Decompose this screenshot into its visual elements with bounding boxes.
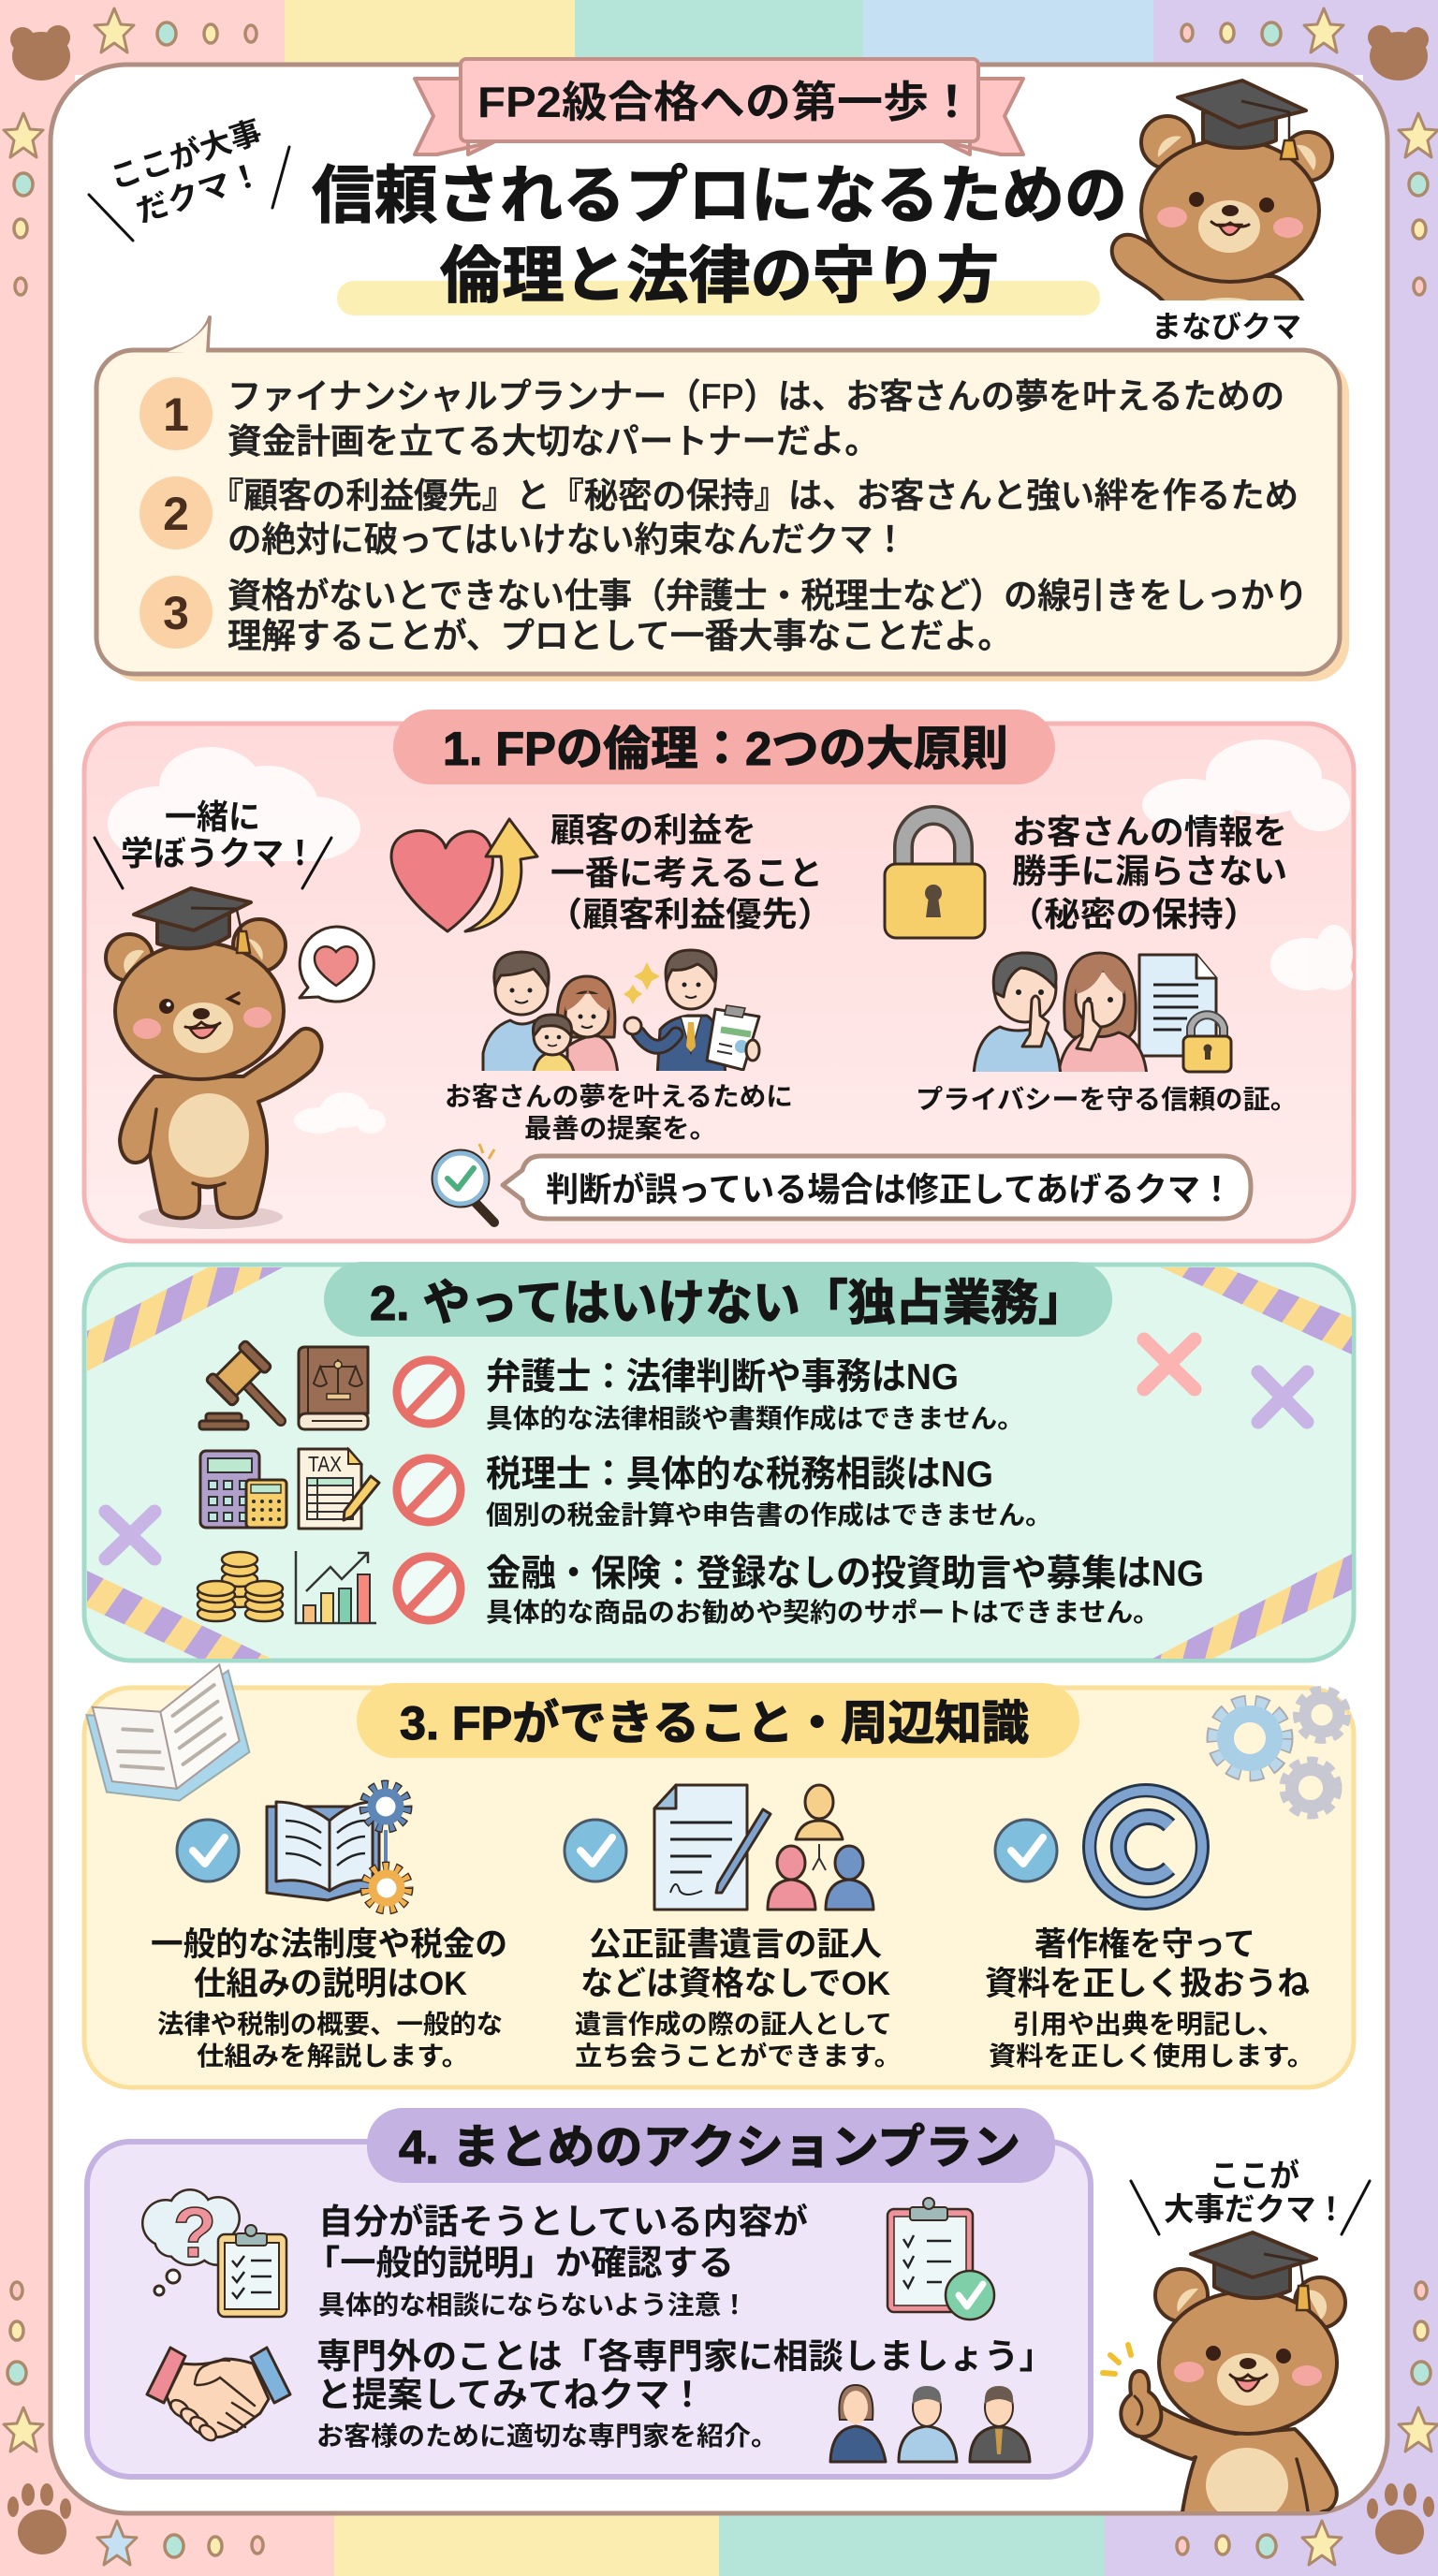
row: 税理士 [200, 1449, 1052, 1530]
text: 専門家に相談: お客様のために適切な専門家を紹介。 [316, 2422, 778, 2451]
callout: 修正 [503, 1156, 1251, 1219]
text: 専門家に相談: 専門外のことは「各専門家に相談しましょう」 [316, 2337, 1054, 2376]
mascot: waving bear with graduation cap [1112, 80, 1332, 320]
bear speech: 一緒に学ぼうクマ！ [95, 798, 331, 888]
column 2: 公正証書遺言の証人 [565, 1785, 902, 2071]
illustration: privacy, two people with document and lock [974, 953, 1231, 1076]
row: 金融・保険: 具体的な商品のお勧めや契約のサポートはできません。 [486, 1598, 1160, 1627]
row: 弁護士: 弁護士：法律判断や事務はNG [486, 1357, 959, 1398]
section heading: 2. やってはいけない「独占業務」 [370, 1277, 1086, 1331]
icon: heart speech bubble [300, 927, 374, 1002]
panel 1: FPの倫理 [84, 710, 1354, 1241]
row: 金融・保険: 金融・保険：登録なしの投資助言や募集はNG [486, 1554, 1204, 1594]
row: 弁護士 [199, 1340, 1024, 1433]
point 2: の絶対に破ってはいけない約束なんだクマ！ [227, 520, 907, 559]
column 1: 一般的な説明 [151, 1785, 507, 2071]
icon: prohibited [397, 1458, 461, 1522]
callout: 修正: 判断が誤っている場合は修正してあげるクマ！ [546, 1170, 1233, 1208]
row: 金融・保険 [198, 1551, 1204, 1627]
column 3: 著作権 [985, 1785, 1314, 2071]
clouds [108, 739, 1353, 1134]
text: 秘密の保持 [1008, 812, 1287, 933]
section heading: 1. FPの倫理：2つの大原則 [443, 723, 1008, 775]
bear speech: ここが大事だクマ！ [1131, 2158, 1370, 2234]
sparkle marks near thumb [1103, 2345, 1131, 2374]
point 1: ファイナンシャルプランナー（FP）は、お客さんの夢を叶えるための [227, 377, 1284, 416]
column 1: 一般的な説明: 仕組みを解説します。 [197, 2042, 469, 2071]
icon: clipboard with green check [888, 2198, 994, 2320]
icon: check [177, 1820, 239, 1881]
text: 顧客利益優先: 一番に考えること [550, 854, 823, 892]
caption: 最善の提案: お客さんの夢を叶えるために [445, 1082, 793, 1111]
bear speech: 一緒に学ぼうクマ！: 一緒に [165, 798, 260, 836]
point 2 [139, 476, 1299, 559]
bear speech: 一緒に学ぼうクマ！: 学ぼうクマ！ [121, 834, 316, 872]
point 1 [139, 377, 1284, 461]
point 1: 資金計画を立てる大切なパートナーだよ。 [227, 422, 879, 461]
point 3: 3 [163, 587, 189, 639]
text: 一般的説明: 自分が話そうとしている内容が [318, 2203, 808, 2241]
icon: signed document and pen [654, 1785, 770, 1910]
column 2: 公正証書遺言の証人: 立ち会うことができます。 [575, 2041, 902, 2071]
icon: growth chart [296, 1551, 376, 1623]
ribbon banner: FP2級合格への第一歩！: FP2級合格への第一歩！ [477, 78, 975, 126]
point 3: 資格がないとできない仕事（弁護士・税理士など）の線引きをしっかり [227, 577, 1308, 615]
decorative open book [82, 1662, 257, 1816]
text: 専門家に相談 [316, 2337, 1054, 2451]
section heading [357, 1683, 1079, 1758]
panel 3: FPができること [82, 1662, 1354, 2087]
caption: プライバシー: プライバシーを守る信頼の証。 [916, 1085, 1298, 1114]
column 2: 公正証書遺言の証人: 遺言作成の際の証人として [575, 2010, 892, 2039]
ribbon banner: FP2級合格への第一歩！ [415, 59, 1023, 154]
text: 顧客利益優先 [547, 811, 833, 933]
icon: prohibited [397, 1557, 461, 1620]
column 3: 著作権: 著作権を守って [1034, 1926, 1255, 1963]
caption: 最善の提案 [445, 1082, 793, 1143]
column 1: 一般的な説明: 一般的な法制度や税金の [151, 1926, 507, 1963]
caption: 最善の提案: 最善の提案を。 [524, 1114, 717, 1143]
point 1: 1 [163, 388, 189, 441]
panel 4: まとめのアクションプラン [87, 2108, 1091, 2477]
icon: book and gears [267, 1785, 408, 1910]
tilted callout: ここが大事だクマ！: だクマ！ [132, 156, 266, 229]
main title [312, 161, 1127, 310]
mascot: thumbs-up bear [1121, 2232, 1345, 2523]
point 3: 理解することが、プロとして一番大事なことだよ。 [227, 617, 1012, 655]
icon: thought cloud with question and clipboard: ? [173, 2193, 216, 2273]
icon: calculators [200, 1451, 286, 1528]
tilted callout: ここが大事だクマ！: ここが大事 [106, 114, 266, 196]
main title: 信頼されるプロになるための [312, 161, 1127, 231]
icon: padlock [885, 815, 985, 938]
column 3: 著作権: 資料を正しく扱おうね [985, 1966, 1310, 2002]
row: 税理士: 税理士：具体的な税務相談はNG [486, 1455, 993, 1495]
section heading: 3. FPができること・周辺知識 [400, 1697, 1029, 1749]
text: 顧客利益優先: 顧客の利益を [550, 811, 756, 849]
main title: 倫理と法律の守り方 [440, 241, 999, 310]
point 3 [139, 576, 1308, 655]
mascot: winking bear [106, 888, 322, 1229]
text: 顧客利益優先: （顧客利益優先） [547, 895, 833, 933]
icon: magnifier with check [433, 1144, 494, 1222]
illustration: family with advisor [483, 950, 759, 1076]
panel 2: 独占業務 [84, 1262, 1354, 1661]
column 2: 公正証書遺言の証人: などは資格なしでOK [580, 1966, 890, 2002]
icon: thought cloud with question and clipboard [141, 2188, 286, 2317]
point 2: 『顧客の利益優先』と『秘密の保持』は、お客さんと強い絆を作るため [210, 476, 1299, 515]
icon: law book [299, 1347, 368, 1429]
point 2: 2 [163, 488, 189, 540]
section heading [367, 2108, 1055, 2183]
text: 秘密の保持: お客さんの情報を [1012, 812, 1287, 851]
text: 一般的説明 [304, 2203, 808, 2320]
yellow title highlight [337, 281, 1100, 315]
tilted callout: ここが大事だクマ！ [89, 114, 289, 241]
section heading: 4. まとめのアクションプラン [399, 2121, 1020, 2174]
text: 一般的説明: 「一般的説明」か確認する [304, 2244, 734, 2282]
bear speech: ここが大事だクマ！: 大事だクマ！ [1164, 2192, 1346, 2228]
section heading [393, 710, 1055, 784]
column 2: 公正証書遺言の証人: 公正証書遺言の証人 [589, 1926, 882, 1963]
icon: prohibited [397, 1360, 461, 1424]
icon: heart with up arrow [391, 819, 537, 931]
icon: handshake [147, 2348, 290, 2443]
section heading [324, 1262, 1112, 1337]
decorative X marks [106, 1339, 1307, 1559]
icon: check [995, 1820, 1057, 1881]
row: 弁護士: 具体的な法律相談や書類作成はできません。 [486, 1404, 1024, 1433]
icon: tax document: TAX [308, 1452, 342, 1476]
icon: copyright [1084, 1785, 1208, 1909]
text: 一般的説明: 具体的な相談にならないよう注意！ [318, 2291, 748, 2320]
striped corner ribbons [87, 1267, 1352, 1659]
icon: coin stacks [198, 1552, 283, 1621]
row: 税理士: 個別の税金計算や申告書の作成はできません。 [486, 1500, 1052, 1530]
icon: witnesses [768, 1785, 873, 1910]
text: 専門家に相談: と提案してみてねクマ！ [316, 2376, 705, 2414]
speech summary panel [96, 317, 1349, 681]
column 1: 一般的な説明: 仕組みの説明はOK [194, 1966, 467, 2002]
icon: tax document [299, 1449, 379, 1529]
text: 秘密の保持: （秘密の保持） [1008, 895, 1259, 933]
decorative gears [1214, 1692, 1344, 1812]
column 3: 著作権: 引用や出典を明記し、 [1013, 2010, 1284, 2039]
icon: gavel [199, 1340, 281, 1429]
bear speech: ここが大事だクマ！: ここが [1210, 2158, 1299, 2194]
mascot name label: まなびクマ [1152, 310, 1301, 344]
text: 秘密の保持: 勝手に漏らさない [1012, 852, 1287, 890]
icon: check [565, 1820, 626, 1881]
column 1: 一般的な説明: 法律や税制の概要、一般的な [157, 2010, 503, 2039]
icon: three professionals [830, 2385, 1030, 2462]
column 3: 著作権: 資料を正しく使用します。 [989, 2042, 1314, 2071]
